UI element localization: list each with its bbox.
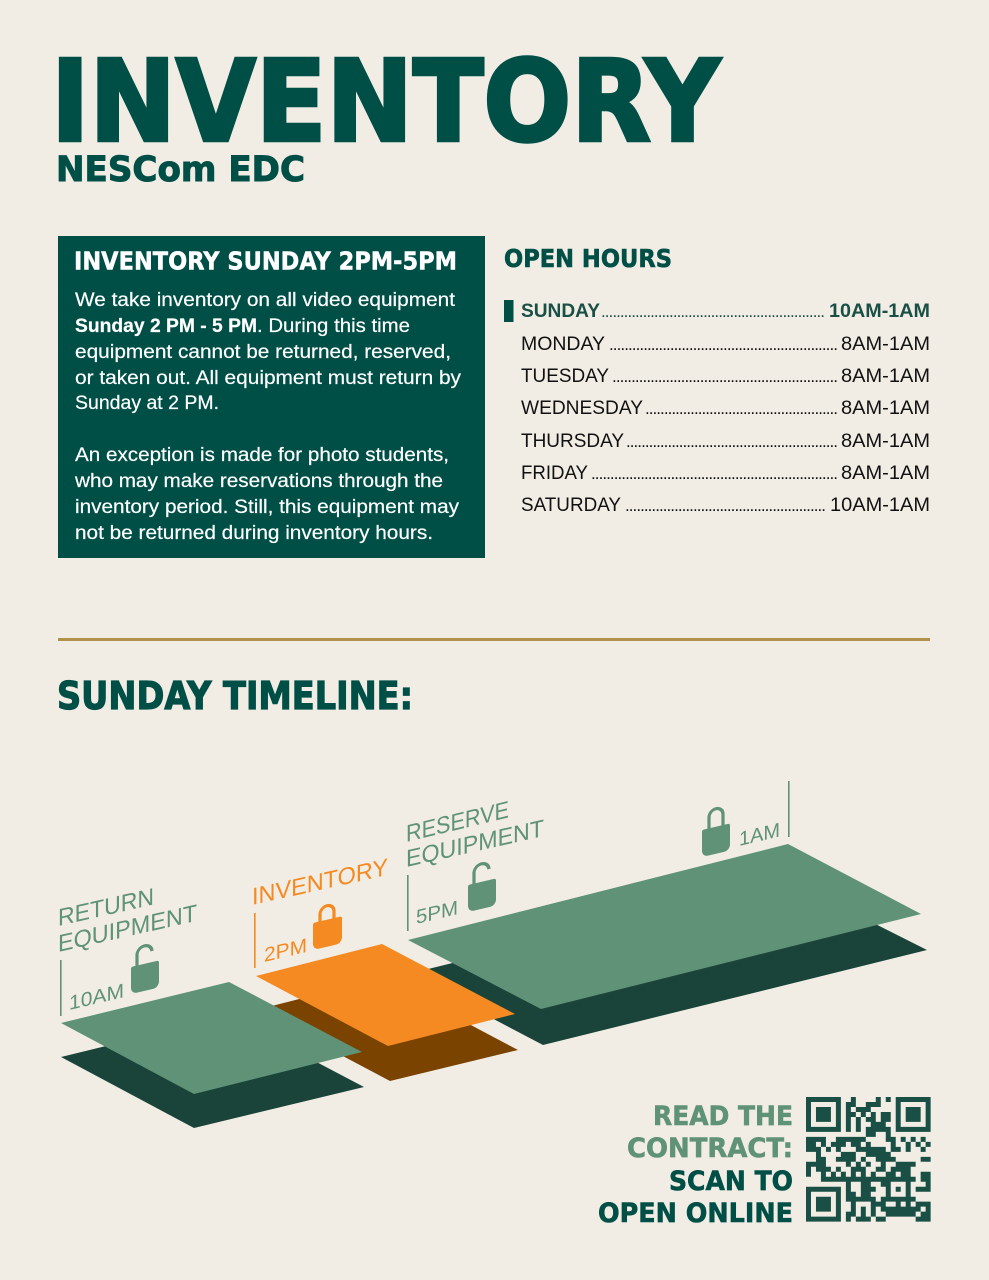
timeline heading: SUNDAY TIMELINE: (57, 674, 413, 718)
icon: locked padlock 1am (702, 805, 730, 857)
icon: unlocked padlock 5pm (468, 860, 496, 912)
row: thursday: ........................................................ (626, 432, 838, 451)
row: thursday (521, 430, 930, 452)
row: tuesday: ........................................................... (612, 367, 838, 386)
block: reserve equipment (408, 844, 927, 1045)
panel body text: equipment cannot be returned, reserved, (75, 342, 451, 363)
QR code (806, 1097, 931, 1222)
label: closing time (739, 781, 790, 851)
row: saturday (521, 494, 930, 516)
label: reserve equipment: 5PM (416, 897, 458, 929)
row: monday: MONDAY (521, 333, 605, 355)
timeline chart (58, 781, 927, 1128)
panel body text: inventory period. Still, this equipment may (75, 497, 459, 518)
call to action text: READ THE (653, 1101, 793, 1132)
row: friday: 8AM-1AM (841, 462, 930, 484)
label: return equipment: RETURN (58, 884, 154, 932)
panel body text: . During this time (257, 316, 410, 337)
row: thursday: 8AM-1AM (841, 430, 930, 452)
label: reserve equipment: EQUIPMENT (406, 815, 544, 873)
block: inventory (256, 944, 515, 1046)
panel body text (74, 290, 461, 544)
label: inventory (252, 854, 388, 968)
row: wednesday (521, 397, 930, 419)
panel heading: INVENTORY SUNDAY 2PM-5PM (74, 246, 457, 276)
row: tuesday (521, 365, 930, 387)
row: wednesday: ................................................... (645, 399, 838, 418)
call to action text (598, 1101, 793, 1229)
label: return equipment: EQUIPMENT (58, 900, 197, 958)
panel body text: We take inventory on all video equipment (75, 290, 456, 311)
sunday highlight marker (504, 300, 514, 322)
open hours table (504, 300, 930, 516)
panel body text: not be returned during inventory hours. (75, 523, 433, 544)
row: thursday: THURSDAY (521, 430, 624, 452)
label: inventory: INVENTORY (252, 854, 388, 911)
icon: locked padlock 2pm (313, 902, 342, 950)
block: return equipment (61, 982, 364, 1128)
title: INVENTORY (51, 38, 722, 168)
call to action text: OPEN ONLINE (598, 1198, 793, 1229)
panel body text: Sunday 2 PM - 5 PM (75, 316, 257, 337)
label: inventory: 2PM (264, 935, 307, 967)
row: saturday: ..................................................... (625, 496, 826, 515)
row: sunday: 10AM-1AM (829, 300, 930, 322)
row: monday: 8AM-1AM (841, 333, 930, 355)
row: saturday: 10AM-1AM (830, 494, 930, 516)
panel body text: Sunday at 2 PM. (75, 393, 219, 414)
label: return equipment (58, 884, 197, 1016)
row: tuesday: TUESDAY (521, 365, 609, 387)
row: sunday (521, 300, 930, 322)
panel: inventory sunday (58, 236, 485, 558)
call to action text: SCAN TO (669, 1166, 793, 1197)
row: monday (521, 333, 930, 355)
panel body text: An exception is made for photo students, (75, 445, 449, 466)
row: monday: ............................................................ (609, 335, 838, 354)
row: wednesday: 8AM-1AM (841, 397, 930, 419)
row: friday: FRIDAY (521, 462, 588, 484)
row: friday: ................................................................. (591, 464, 838, 483)
label: closing time: 1AM (739, 820, 780, 851)
row: sunday: SUNDAY (521, 300, 600, 322)
label: reserve equipment (406, 797, 544, 931)
label: reserve equipment: RESERVE (406, 797, 509, 848)
call to action text: CONTRACT: (627, 1133, 793, 1164)
block: inventory shadow (256, 978, 518, 1081)
row: wednesday: WEDNESDAY (521, 397, 643, 419)
panel body text: who may make reservations through the (74, 471, 443, 492)
icon: unlocked padlock 10am (131, 942, 159, 994)
row: sunday: ........................................................... (601, 302, 825, 321)
row: tuesday: 8AM-1AM (841, 365, 930, 387)
panel body text: or taken out. All equipment must return by (75, 368, 461, 389)
row: saturday: SATURDAY (521, 494, 621, 516)
row: friday (521, 462, 930, 484)
label: return equipment: 10AM (69, 980, 124, 1015)
open hours heading: OPEN HOURS (504, 244, 672, 273)
subtitle: NESCom EDC (56, 150, 305, 190)
